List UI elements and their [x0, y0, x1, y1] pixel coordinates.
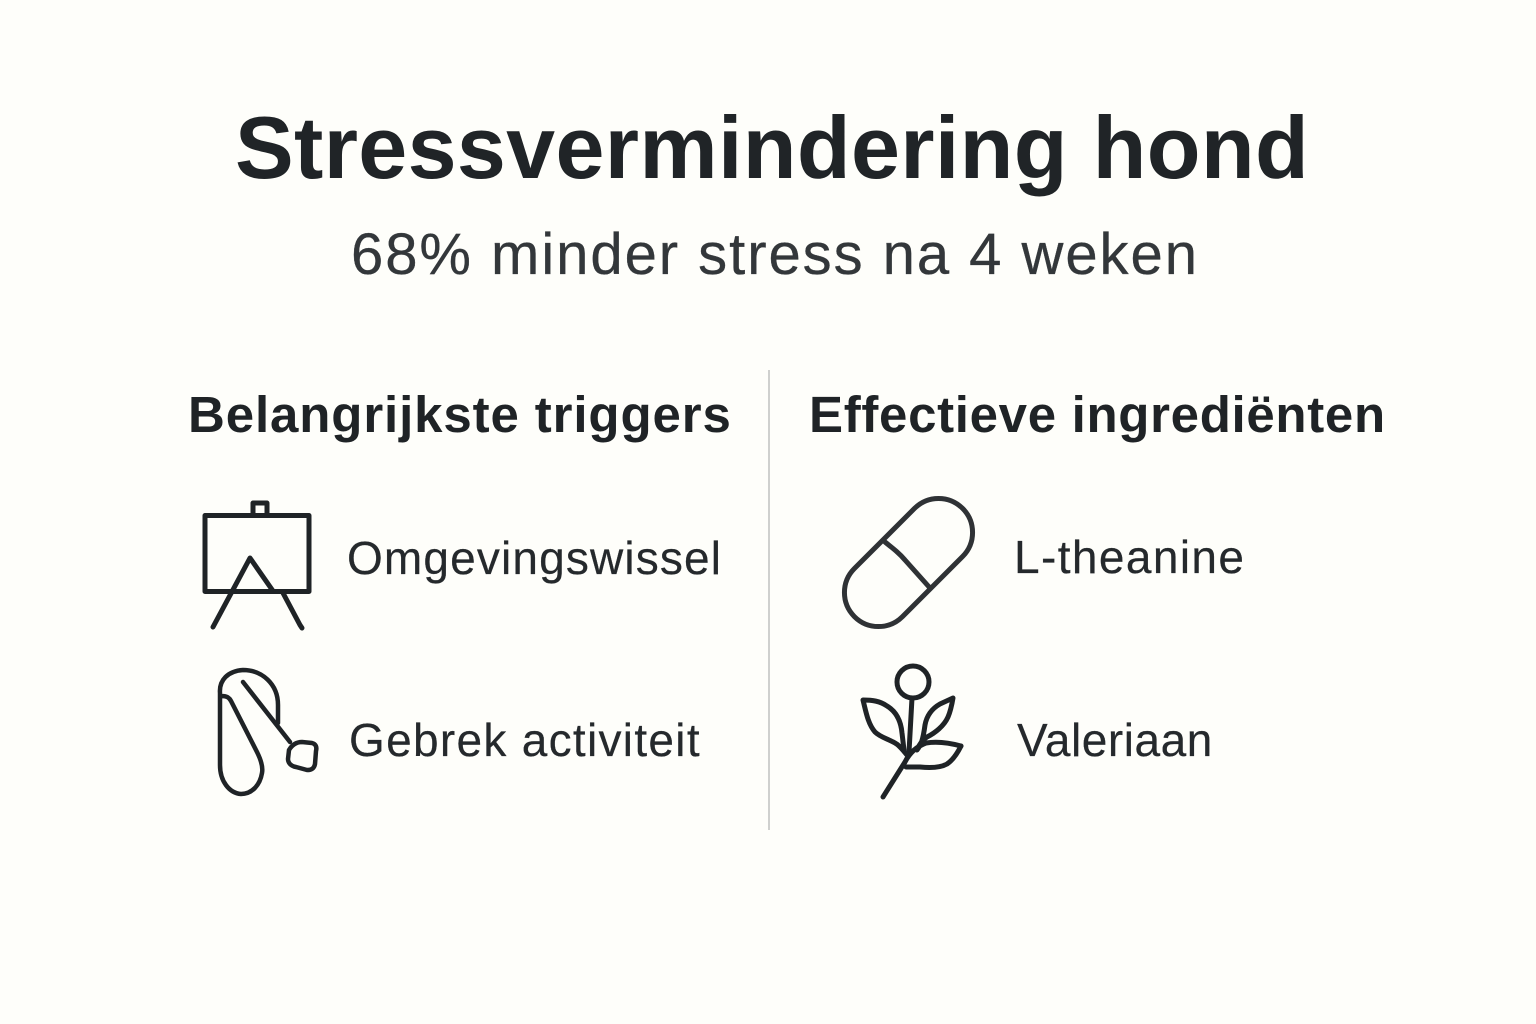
label: Gebrek activiteit: Gebrek activiteit [349, 714, 701, 766]
panel: ingredients [809, 386, 1386, 800]
label: Valeriaan: Valeriaan [1017, 714, 1213, 766]
icon: easel [202, 500, 312, 630]
icon: plant [860, 664, 964, 800]
icon: leash [218, 668, 319, 796]
subtitle: 68% minder stress na 4 weken [351, 222, 1199, 287]
panel: triggers [188, 386, 732, 796]
title: Stressvermindering hond [235, 98, 1309, 196]
icon: capsule [842, 496, 976, 629]
label: L-theanine: L-theanine [1014, 531, 1245, 583]
label: Omgevingswissel: Omgevingswissel [347, 532, 722, 584]
heading: ingredients: Effectieve ingrediënten [809, 386, 1386, 443]
heading: triggers: Belangrijkste triggers [188, 386, 732, 443]
